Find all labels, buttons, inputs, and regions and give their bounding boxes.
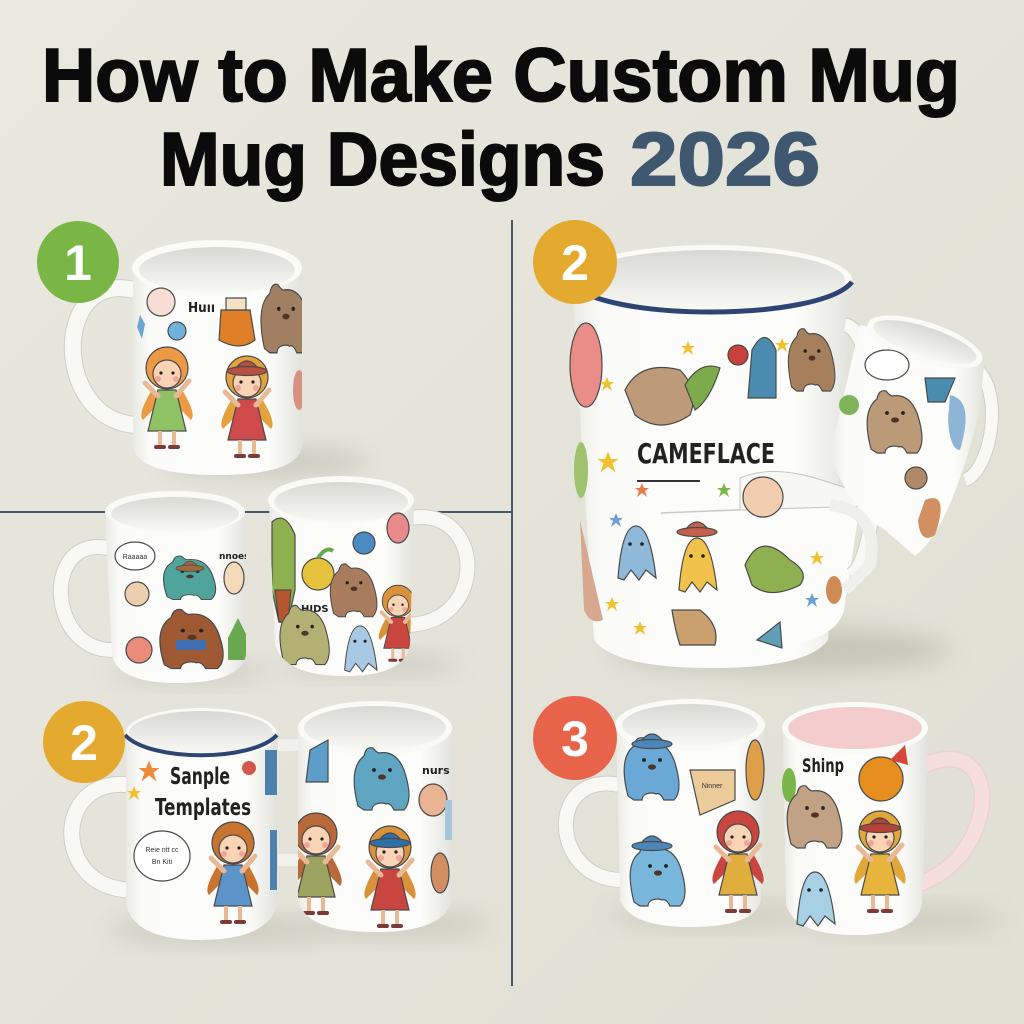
mug pair illustrations left: nnoes: [219, 552, 249, 562]
panel: step 2 big mug: [570, 245, 992, 672]
badge: step 2 top: [533, 220, 617, 304]
panel: bottom-left sample templates mugs: [72, 701, 490, 942]
sample templates illustrations: Bn Kiti: [152, 859, 173, 866]
panel: pair of mugs middle left: [61, 476, 468, 683]
sample templates illustrations: [127, 750, 277, 922]
mug 1 illustrations: [137, 284, 310, 456]
title: [42, 33, 960, 201]
title: Mug Designs: [160, 117, 605, 201]
big mug illustrations: [570, 323, 835, 635]
cut-out panel: [661, 472, 900, 655]
step 3 illustrations: Ninner: [702, 783, 723, 790]
second mug illustrations: [290, 740, 452, 926]
dividers: [0, 220, 512, 986]
badge: step 1: [37, 221, 119, 303]
mug pair illustrations left: Raaaaa: [123, 554, 147, 561]
badge: step 2 top: 2: [561, 235, 589, 291]
sample templates illustrations: Templates: [155, 795, 251, 821]
step 3 illustrations: Shinp: [802, 755, 844, 777]
title: How to Make Custom Mug: [42, 33, 960, 117]
panel: step 1 mug: [73, 240, 370, 476]
mug pair illustrations right: HIDS: [301, 604, 329, 615]
badge: step 3: [533, 696, 617, 780]
sample templates illustrations: Reie ntt cc: [145, 847, 179, 854]
mug 1 illustrations: Huıı: [188, 301, 215, 316]
mug pair illustrations left: [115, 542, 249, 669]
badge: step 3: 3: [561, 711, 589, 767]
second mug illustrations: nurs: [422, 764, 450, 777]
sample templates illustrations: Sanple: [170, 764, 230, 790]
badge: step 2 bottom: 2: [70, 715, 98, 771]
title: 2026: [630, 117, 820, 201]
panel: step 3 mugs: [566, 699, 1000, 935]
badge: step 1: 1: [64, 235, 92, 291]
badge: step 2 bottom: [43, 701, 125, 783]
step 3 illustrations: [624, 734, 908, 926]
mug pair illustrations right: [272, 513, 417, 672]
big mug illustrations: CAMEFLACE: [637, 437, 775, 470]
small inset mug: [830, 304, 992, 575]
